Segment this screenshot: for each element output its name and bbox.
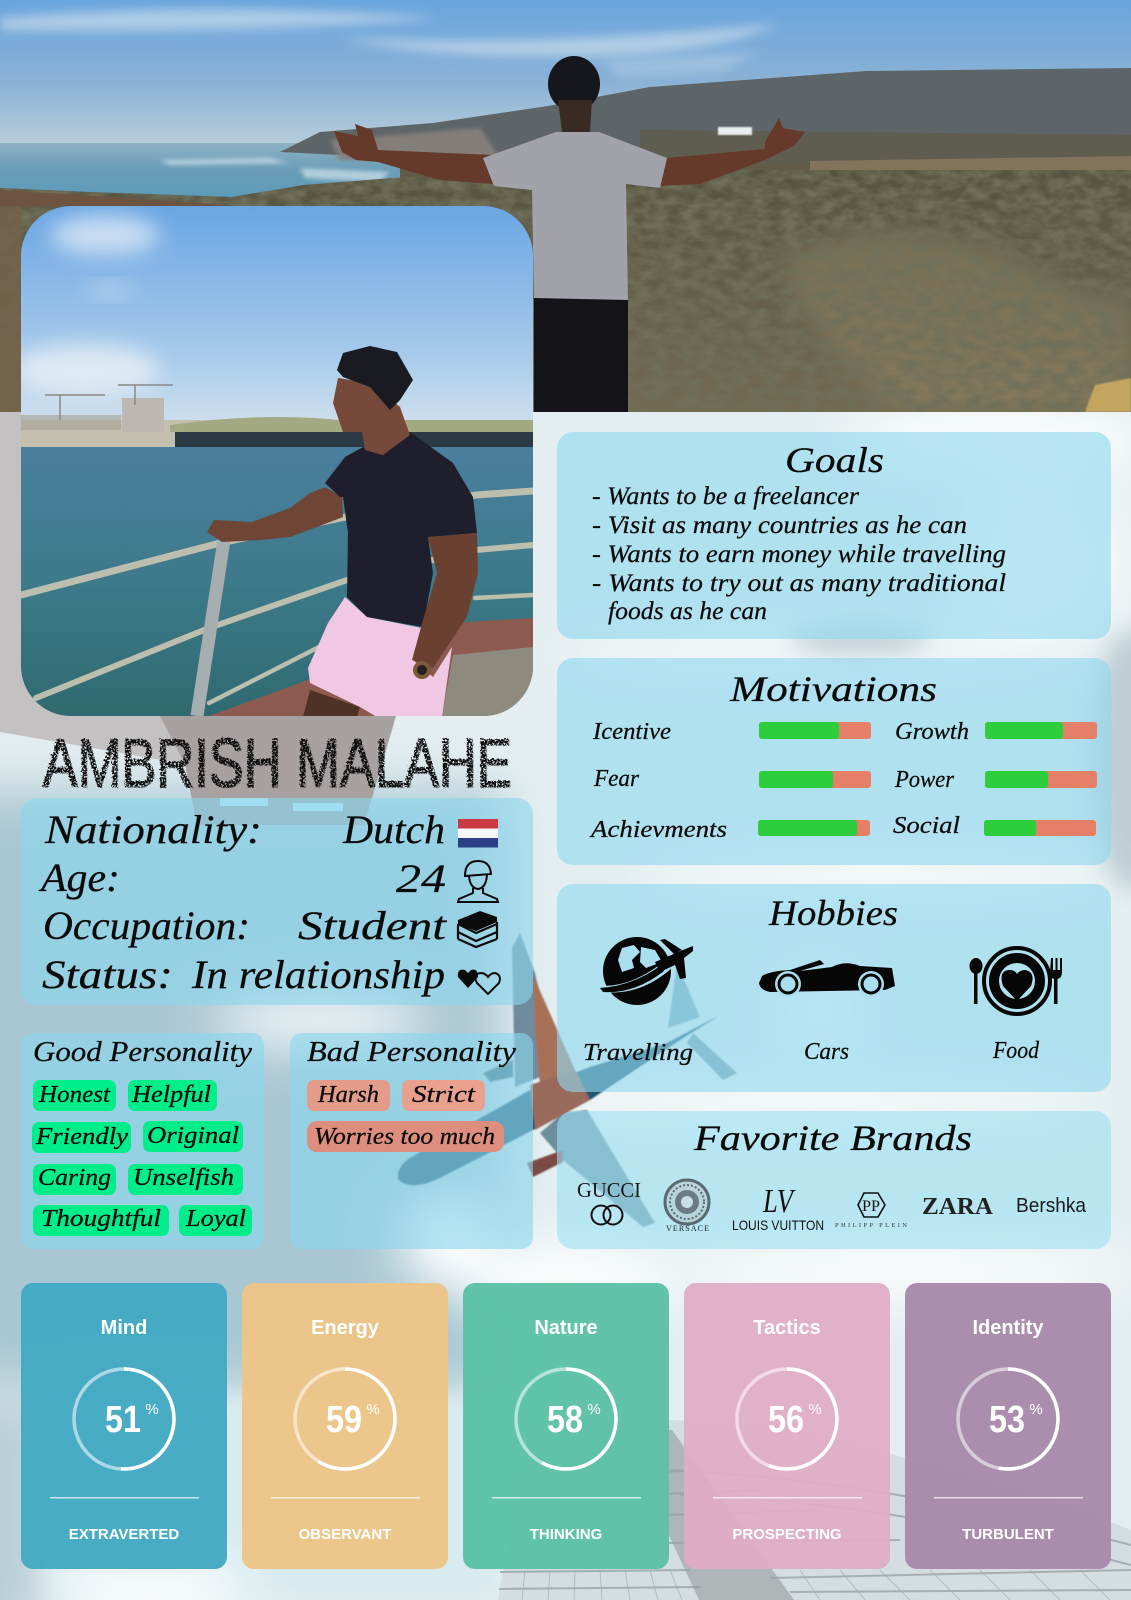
trait chips: good: Thoughtful (41, 1206, 161, 1232)
scrub foreground (0, 170, 1131, 244)
card: mind: EXTRAVERTED (69, 1526, 179, 1543)
icon: stack of books (458, 911, 497, 947)
person (207, 487, 343, 542)
logo: louis vuitton: LOUIS VUITTON (732, 1217, 824, 1233)
icon: plate with heart and cutlery (970, 948, 1062, 1014)
card: tactics: Tactics (753, 1317, 821, 1339)
gauge: 56 percent: % (808, 1401, 822, 1418)
trait chips: good: Loyal (185, 1206, 246, 1232)
card: tactics: PROSPECTING (732, 1526, 842, 1543)
text block: goals list: - Wants to be a freelancer (592, 483, 859, 510)
logo: versace: VERSACE (666, 1224, 709, 1233)
icon: globe with plane (600, 937, 693, 1005)
text block: personal details: Age: (38, 855, 120, 900)
gauge: 53 percent (958, 1369, 1058, 1469)
icon: worker bust (458, 861, 498, 902)
card: mind: Mind (101, 1317, 147, 1339)
text block: personal details: Status: (42, 952, 173, 997)
icon: two hearts (458, 970, 500, 994)
heading: hobbies: Hobbies (768, 893, 898, 933)
icon: dutch flag (458, 819, 498, 848)
text block: goals list: foods as he can (608, 598, 767, 625)
card: identity: TURBULENT (962, 1526, 1054, 1543)
logo: gucci: GUCCI (577, 1178, 641, 1202)
motivation labels: Social (893, 813, 960, 839)
card: identity (905, 1283, 1111, 1569)
motivation labels: Growth (895, 719, 969, 745)
text block: personal details: Occupation: (43, 903, 250, 948)
gauge: 58 percent (516, 1369, 616, 1469)
upper building (0, 412, 396, 825)
heading: bad personality: Bad Personality (307, 1036, 516, 1068)
top banner photo: man with open arms over the coast (0, 0, 1131, 412)
gauge: 59 percent (295, 1369, 395, 1469)
portrait photo: man at a railing by the water (10, 206, 533, 717)
hobby labels: Food (992, 1038, 1040, 1064)
trait chips: good (32, 1080, 252, 1236)
logo: louis vuitton (732, 1183, 824, 1233)
gauge: 56 percent (737, 1369, 837, 1469)
card: energy (242, 1283, 448, 1569)
heading: goals: Goals (785, 440, 884, 480)
logo: zara: ZARA (922, 1194, 994, 1220)
panel: bad personality (290, 1033, 533, 1249)
text block: goals list: - Wants to try out as many traditional (592, 570, 1006, 597)
trait chips: good: Caring (38, 1165, 111, 1191)
gauge: 51 percent: 51 (105, 1399, 141, 1441)
heading: favorite brands: Favorite Brands (693, 1118, 972, 1158)
gauge: 51 percent (74, 1369, 174, 1469)
gauge: 53 percent: 53 (989, 1399, 1025, 1441)
lower building (498, 1420, 1131, 1600)
trait chips: bad: Harsh (317, 1082, 379, 1108)
heading: good personality: Good Personality (33, 1036, 252, 1068)
gauge: 59 percent: % (366, 1401, 380, 1418)
hobby labels: Cars (804, 1039, 849, 1065)
trait chips: bad: Strict (412, 1082, 477, 1108)
card: energy: Energy (311, 1317, 380, 1339)
plane (398, 933, 737, 1227)
trait chips: good: Unselfish (133, 1165, 234, 1191)
hills (280, 68, 1131, 158)
man (334, 56, 805, 412)
text block: personal details: 24 (396, 856, 446, 901)
panel: motivations (557, 658, 1111, 865)
trait chips: good: Original (147, 1123, 239, 1149)
card: identity: Identity (972, 1317, 1044, 1339)
logo: gucci (577, 1178, 641, 1224)
text block: personal details (38, 807, 447, 997)
logo: bershka: Bershka (1016, 1195, 1087, 1217)
railings (21, 491, 533, 716)
motivation labels (589, 719, 969, 843)
gauge: 58 percent: % (587, 1401, 601, 1418)
logo: philipp plein (835, 1193, 907, 1229)
trait chips: good: Honest (38, 1082, 111, 1108)
panel: good personality (21, 1033, 264, 1249)
trait chips: bad (307, 1080, 504, 1152)
card: nature (463, 1283, 669, 1569)
motivation labels: Achievments (589, 817, 727, 843)
logo: louis vuitton: LV (762, 1183, 796, 1220)
logo: philipp plein: PP (862, 1198, 880, 1215)
trait chips: good: Helpful (131, 1082, 211, 1108)
icon: convertible car (759, 960, 895, 997)
text block: personal details: In relationship (191, 952, 445, 997)
text block: goals list (592, 483, 1006, 625)
panel: favorite brands (557, 1111, 1111, 1249)
gauge: 59 percent: 59 (326, 1399, 362, 1441)
sea (0, 143, 400, 197)
gauge: 58 percent: 58 (547, 1399, 583, 1441)
panel: hobbies (557, 884, 1111, 1092)
hobby labels (583, 1038, 1040, 1066)
motivation labels: Fear (593, 766, 640, 792)
card: energy: OBSERVANT (299, 1526, 391, 1543)
name title: AMBRISH MALAHE (43, 725, 512, 802)
text block: goals list: - Visit as many countries as he can (592, 512, 967, 539)
motivation labels: Icentive (592, 719, 671, 745)
gauge: 56 percent: 56 (768, 1399, 804, 1441)
card: tactics (684, 1283, 890, 1569)
card: nature: Nature (534, 1317, 598, 1339)
text block: personal details: Student (298, 903, 447, 948)
logo: versace (665, 1180, 709, 1233)
trait chips: good: Friendly (35, 1124, 128, 1150)
heading: motivations: Motivations (729, 669, 937, 709)
text block: personal details: Nationality: (44, 807, 262, 852)
text block: personal details: Dutch (342, 807, 445, 852)
panel: personal info (21, 798, 533, 1005)
text block: goals list: - Wants to earn money while travelling (592, 541, 1006, 568)
brick pier (209, 618, 533, 716)
gauge: 53 percent: % (1029, 1401, 1043, 1418)
trait chips: bad: Worries too much (314, 1124, 495, 1150)
card: nature: THINKING (530, 1526, 602, 1543)
gauge: 51 percent: % (145, 1401, 159, 1418)
card: mind (21, 1283, 227, 1569)
hobby labels: Travelling (583, 1040, 693, 1066)
logo: philipp plein: PHILIPP PLEIN (835, 1222, 907, 1229)
panel: goals (557, 432, 1111, 639)
motivation bars (758, 722, 1097, 836)
motivation labels: Power (894, 767, 955, 793)
